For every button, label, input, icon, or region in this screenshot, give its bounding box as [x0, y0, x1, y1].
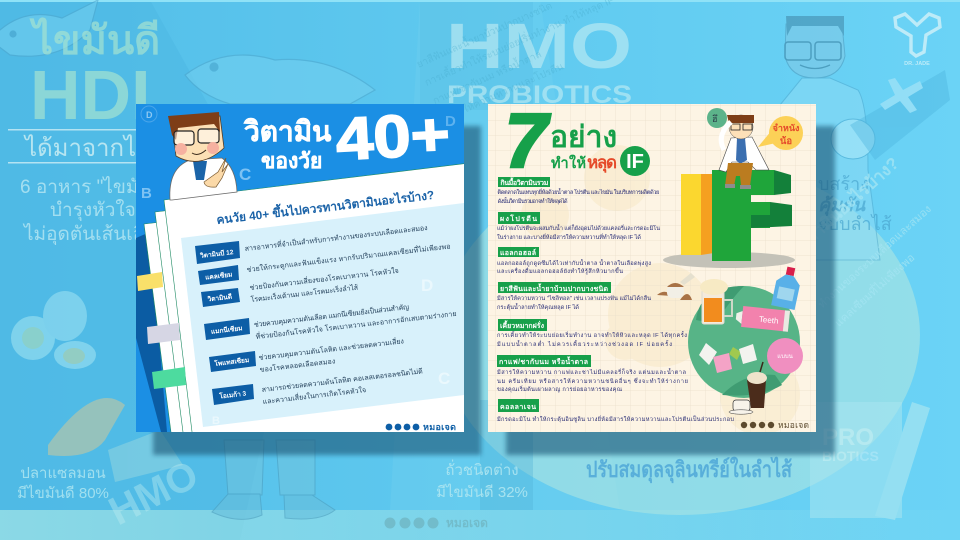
title [243, 114, 448, 169]
vitamin label text: โอเมก้า 3 [218, 388, 247, 401]
ghost text: right column: บสร้าง [818, 174, 869, 194]
vitamin descriptions: ช่วยป้องกันความเสี่ยงของโรคเบาหวาน โรคหัวใจ [249, 266, 399, 292]
footer social: หมอเจด [446, 516, 488, 530]
icon: bubble gum: แบบน [777, 354, 793, 360]
vitamin descriptions [244, 223, 457, 406]
social footer [740, 422, 808, 428]
panel letters: B [212, 415, 220, 427]
ghost rotated text strip: ยาสีฟันและน้ำยาบ้วนปากบางชนิด [414, 0, 554, 71]
ghost text: right column [818, 174, 892, 234]
title: อย่าง [550, 121, 617, 154]
ghost rotated text right: ทำงานของระบบเลือดและสมอง [815, 202, 934, 311]
ghost panel: pro-biotics box [810, 402, 930, 520]
icon: collagen powder [657, 273, 695, 300]
ghost illustration: eggs and salmon [11, 291, 183, 482]
section body text: แม้ว่าผงโปรตีนจะผสมกับน้ำ แต่ก็ยังอุดมไปด้วยแคลอรี่และกรดอะมิโน [497, 223, 660, 232]
panel: vitamins for age 40+ [136, 100, 470, 440]
logo: Dr. Jade [895, 14, 940, 67]
section heading text: กินมื้อวิตามินรวม [500, 176, 549, 187]
icon: bubble gum [767, 338, 803, 374]
ghost doctor legs [212, 440, 335, 519]
speech: callout: จำหนัง [773, 123, 799, 133]
ghost text: nuts [436, 459, 528, 501]
section body text: การเคี้ยวทำให้ระบบย่อยเริ่มทำงาน อาจทำให้หิวและหลุด IF ได้ทุกครั้ง [497, 331, 687, 339]
ghost heading: HDL: HDL [30, 56, 174, 134]
question heading: คนวัย 40+ ขึ้นไปควรทานวิตามินอะไรบ้าง? [215, 185, 435, 227]
title: IF [626, 151, 644, 173]
icon: coffee drinks [729, 362, 767, 414]
ghost heading: HMO probiotics: HMO [446, 10, 632, 82]
icon: chewing gums [699, 343, 757, 373]
letter badges: D [445, 113, 456, 130]
ghost text: right column: คุ้มกัน [818, 195, 867, 217]
letter badges: D [146, 110, 153, 120]
ghost text: right column: ะบบลำไส้ [818, 213, 892, 234]
page tabs [137, 272, 186, 389]
social footer: หมอเจด [423, 422, 456, 432]
ghost rotated text strip: กาแฟ/ชากับนม หรือน้ำตาล [430, 46, 543, 107]
doctor mascot [168, 112, 237, 200]
ghost text: salmon: ปลาแซลมอน [20, 465, 106, 482]
ghost rotated text strip: มีสารให้ความหวานและโปรตีน [439, 59, 565, 125]
speech: callout [758, 116, 803, 150]
ghost panel: pro-biotics box: PRO [822, 424, 874, 451]
vitamin descriptions: ที่ช่วยป้องกันโรคหัวใจ โรคเบาหวาน และอาการอักเสบตามร่างกาย [255, 309, 457, 341]
ghost rotated text right [775, 153, 955, 330]
section body text: นม ครีมเทียม หรือสารให้ความหวานชนิดอื่นๆ ซึ่งจะทำให้ร่างกาย [497, 377, 688, 385]
title: ของวัย [261, 150, 322, 173]
ghost illustration: doctor with fist [780, 16, 880, 260]
icon: toothpaste: Teeth [758, 315, 779, 326]
social footer: หมอเจด [778, 420, 809, 430]
bottom band [0, 510, 960, 540]
ghost text: salmon: มีไขมันดี 80% [17, 484, 109, 502]
title: 40+ [334, 100, 452, 173]
IF 3D letters [663, 170, 795, 268]
icon: mouthwash [771, 266, 800, 310]
section body text: มีสารให้ความหวาน กาแฟและชาไม่มีแคลอรี่ก็จริง แต่นมและน้ำตาล [497, 367, 686, 376]
stacked pages [144, 163, 470, 440]
section body text: มีสารให้ความหวาน "ไซลิทอล" เช่น เวลาแปรงฟัน แม้ไม่ได้กลืน [497, 295, 651, 302]
vitamin label text: แคลเซียม [205, 270, 233, 282]
paper blobs [521, 145, 800, 435]
ghost heading: HDL: บำรุงหัวใจ [50, 199, 136, 222]
panel: 7 things that break IF [488, 99, 816, 435]
section heading text: ยาสีฟันและน้ำยาบ้วนปากบางชนิด [500, 282, 608, 293]
title: ทำให้ [551, 154, 586, 172]
logo: Dr. Jade: DR. JADE [904, 61, 930, 67]
icon: toothpaste [735, 305, 790, 332]
ghost rotated text right: แคลเซียมที่ไม่เพียงพอ [831, 250, 917, 330]
back page strip [136, 232, 167, 432]
title [508, 112, 650, 176]
section heading text: เคี้ยวหมากฝรั่ง [500, 319, 545, 330]
vitamin descriptions: ช่วยควบคุมความดันโลหิต และช่วยลดความเสี่ยง [258, 336, 404, 362]
ghost heading: HMO probiotics: PROBIOTICS [447, 81, 632, 109]
ghost heading: HMO probiotics [446, 10, 632, 109]
panel letters: D [421, 276, 433, 295]
section body text: และเครื่องดื่มแอลกอฮอล์ยังทำให้รู้สึกหิวมากขึ้น [497, 267, 623, 275]
speech: callout: น้อ [780, 135, 792, 147]
ghost text: nuts: ถั่วชนิดต่าง [445, 459, 519, 479]
section heading text [499, 176, 608, 411]
section heading text: กาแฟ/ชากับนม หรือน้ำตาล [499, 355, 588, 366]
ghost heading: HDL: ไม่อุดตันเส้นเลือด [22, 223, 168, 246]
section body text: แอลกอฮอล์ถูกดูดซึมได้ไวเท่ากับน้ำตาล น้ำตาลในเลือดพุ่งสูง [497, 259, 651, 267]
green circle [688, 286, 800, 398]
social footer [386, 424, 456, 430]
ghost panel: plus card [850, 70, 950, 160]
ghost heading: HDL: 6 อาหาร "ไขมันดี" [20, 176, 170, 198]
section body text: ของคุณเริ่มต้นเผาผลาญ การย่อยอาหารของคุณ [497, 385, 623, 393]
panel letters: C [438, 369, 450, 388]
vitamin label text: วิตามินดี [207, 293, 232, 303]
ghost text: salmon [17, 465, 109, 502]
vitamin descriptions: สารอาหารที่จำเป็นสำหรับการทำงานของระบบเลือดและสมอง [244, 223, 428, 253]
vitamin descriptions: ช่วยให้กระดูกและฟันแข็งแรง หากรับปริมาณแคลเซียมที่ไม่เพียงพอ [246, 241, 451, 274]
section heading text: ผงโปรตีน [500, 214, 537, 223]
vitamin label text: แมกนีเซียม [211, 324, 243, 336]
ghost illustration: fish [0, 0, 375, 104]
ghost rotated text strip [414, 0, 632, 125]
section headings [497, 177, 611, 412]
letter badges: C [239, 165, 251, 184]
letter badges: B [141, 185, 152, 202]
ghost HMO rotated text: HMO [102, 452, 205, 534]
ghost panel: pro-biotics box: BIOTICS [822, 448, 879, 464]
icon: beer [700, 279, 732, 324]
vitamin labels [195, 241, 256, 405]
doctor sitting on IF [719, 115, 769, 189]
ghost heading: HDL: ไขมันดี [29, 17, 160, 63]
title: วิตามิน [243, 116, 331, 147]
section heading text: คอลลาเจน [500, 404, 536, 411]
ghost rotated text right: วิตามินอะไรบ้าง? [793, 153, 902, 254]
speech: thought bubble [707, 108, 727, 128]
section body text: มีแบบน้ำตาลต่ำ ไม่ควรเคี้ยวระหว่างช่วงอด IF บ่อยครั้ง [497, 340, 672, 348]
letter badges [141, 106, 456, 202]
vitamin descriptions: โรคมะเร็งเต้านม และโรคมะเร็งลำไส้ [250, 283, 359, 304]
vitamin descriptions: และความเสี่ยงในการเกิดโรคหัวใจ [262, 385, 367, 406]
section body text: ติดตลาดในแทบทุกยี่ห้อด้วยน้ำตาล โปรตีน และไขมัน ในบริบทการผลิตด้วย [497, 188, 659, 196]
vitamin descriptions: ของโรคหลอดเลือดสมอง [259, 356, 336, 374]
footer social [384, 516, 488, 530]
vitamin descriptions: สามารถช่วยลดความดันโลหิต คอเลสเตอรอลชนิดไม่ดี [261, 366, 423, 394]
section body text: ดังนั้นวิตามินรวมอาจทำให้หลุดได้ [498, 197, 568, 205]
section body text: มีกรดอะมิโน ทำให้กระตุ้นอินซูลิน บางยี่ห้อมีสารให้ความหวานและโปรตีนเป็นส่วนประกอบ [497, 414, 734, 423]
section body text: กระตุ้นน้ำลายทำให้คุณหลุด IF ได้ [497, 303, 579, 311]
vitamin descriptions: ช่วยควบคุมความดันเลือด แมกนีเซียมยังเป็นส่วนสำคัญ [253, 302, 409, 329]
section body text: ในร่างกาย และบางยี่ห้อมีสารให้ความหวานที่ทำให้หลุด IF ได้ [497, 233, 641, 241]
card shadows [153, 126, 835, 455]
ghost heading: HDL: ได้มาจากไหน [23, 134, 168, 162]
ghost text: nuts: มีไขมันดี 32% [436, 483, 528, 501]
vitamin label text [199, 248, 250, 401]
section body text [497, 188, 734, 423]
ghost heading: HDL [8, 17, 174, 246]
ghost caption: probiotics: ปรับสมดุลจุลินทรีย์ในลำไส้ [586, 456, 792, 484]
title: หลุด [587, 153, 617, 173]
vitamin label text: วิตามินบี 12 [199, 248, 234, 260]
vitamin label text: โพแทสเซียม [213, 355, 250, 368]
panel letters [212, 276, 450, 427]
section heading text: แอลกอฮอล์ [500, 248, 536, 257]
speech: thought bubble: ฮึ [712, 114, 718, 124]
title: 7 [505, 99, 551, 184]
info panel [181, 203, 464, 427]
